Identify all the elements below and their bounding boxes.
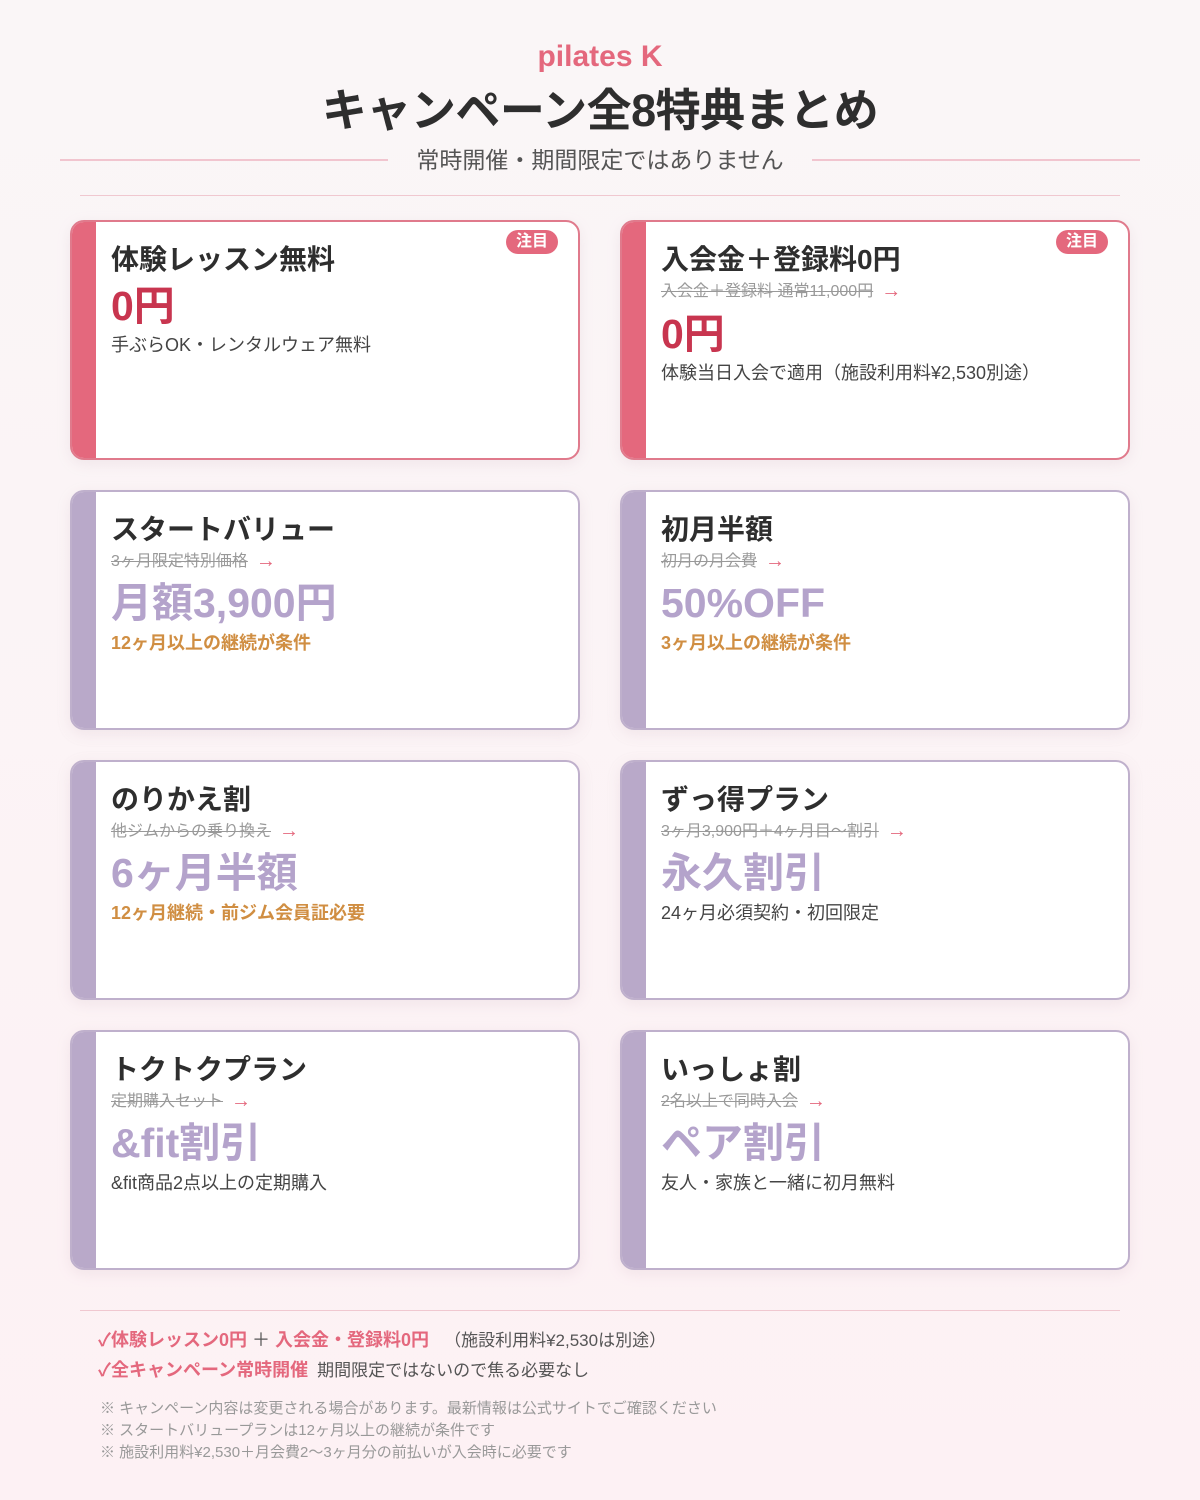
badge bbox=[1056, 230, 1108, 254]
card 7 title: トクトクプラン bbox=[111, 1054, 307, 1085]
card 8 title: いっしょ割 bbox=[661, 1054, 801, 1085]
card 8 value: ペア割引 bbox=[661, 1120, 825, 1166]
card 5 bbox=[70, 760, 580, 1000]
card 8 bbox=[620, 1030, 1130, 1270]
card 2 value: 0円 bbox=[661, 311, 725, 357]
card 7 bbox=[70, 1030, 580, 1270]
title: キャンペーン全8特典まとめ bbox=[322, 85, 878, 136]
card 8 note: 友人・家族と一緒に初月無料 bbox=[661, 1173, 895, 1193]
card 6 value: 永久割引 bbox=[661, 850, 825, 896]
footnotes: ※ 施設利用料¥2,530＋月会費2〜3ヶ月分の前払いが入会時に必要です bbox=[100, 1444, 572, 1461]
card 1 title: 体験レッスン無料 bbox=[111, 244, 335, 275]
card 3 subtitle: 3ヶ月限定特別価格 → bbox=[111, 550, 276, 572]
card 3 title: スタートバリュー bbox=[111, 514, 335, 545]
card 3 note: 12ヶ月以上の継続が条件 bbox=[111, 633, 311, 653]
card 2 bbox=[620, 220, 1130, 460]
card 8 subtitle: 2名以上で同時入会 → bbox=[661, 1090, 826, 1112]
badge: 注目 bbox=[1066, 233, 1098, 250]
card 2 title: 入会金＋登録料0円 bbox=[661, 244, 901, 275]
card 7 value: &fit割引 bbox=[111, 1120, 261, 1166]
card 6 bbox=[620, 760, 1130, 1000]
card 1 value: 0円 bbox=[111, 283, 175, 329]
card 2 note: 体験当日入会で適用（施設利用料¥2,530別途） bbox=[661, 363, 1040, 383]
card 5 subtitle: 他ジムからの乗り換え → bbox=[111, 820, 299, 842]
brand: pilates K bbox=[537, 40, 663, 73]
card 7 subtitle: 定期購入セット → bbox=[111, 1090, 251, 1112]
card 6 title: ずっ得プラン bbox=[661, 784, 829, 815]
summary points: ✓全キャンペーン常時開催 期間限定ではないので焦る必要なし bbox=[98, 1360, 589, 1380]
card 4 title: 初月半額 bbox=[661, 514, 773, 545]
footnotes: ※ キャンペーン内容は変更される場合があります。最新情報は公式サイトでご確認ください bbox=[100, 1400, 717, 1417]
badge bbox=[506, 230, 558, 254]
card 6 note: 24ヶ月必須契約・初回限定 bbox=[661, 903, 879, 923]
summary points: ✓体験レッスン0円 ＋ 入会金・登録料0円 （施設利用料¥2,530は別途） bbox=[98, 1330, 666, 1350]
footnotes: ※ スタートバリュープランは12ヶ月以上の継続が条件です bbox=[100, 1422, 495, 1439]
footnotes bbox=[100, 1400, 717, 1461]
card 1 note: 手ぶらOK・レンタルウェア無料 bbox=[111, 335, 371, 355]
badge: 注目 bbox=[516, 233, 548, 250]
card 5 value: 6ヶ月半額 bbox=[111, 850, 298, 896]
card 3 value: 月額3,900円 bbox=[111, 580, 337, 626]
card 4 value: 50%OFF bbox=[661, 580, 825, 626]
card 5 note: 12ヶ月継続・前ジム会員証必要 bbox=[111, 903, 365, 923]
summary points bbox=[98, 1330, 666, 1380]
card 4 subtitle: 初月の月会費 → bbox=[661, 550, 785, 572]
card 5 title: のりかえ割 bbox=[111, 784, 251, 815]
card 3 bbox=[70, 490, 580, 730]
card 7 note: &fit商品2点以上の定期購入 bbox=[111, 1173, 327, 1193]
card 2 subtitle: 入会金＋登録料 通常11,000円 → bbox=[661, 280, 901, 302]
card 4 bbox=[620, 490, 1130, 730]
subtitle: 常時開催・期間限定ではありません bbox=[416, 147, 784, 173]
card 1 bbox=[70, 220, 580, 460]
card 6 subtitle: 3ヶ月3,900円＋4ヶ月目〜割引 → bbox=[661, 820, 907, 842]
card 4 note: 3ヶ月以上の継続が条件 bbox=[661, 633, 851, 653]
